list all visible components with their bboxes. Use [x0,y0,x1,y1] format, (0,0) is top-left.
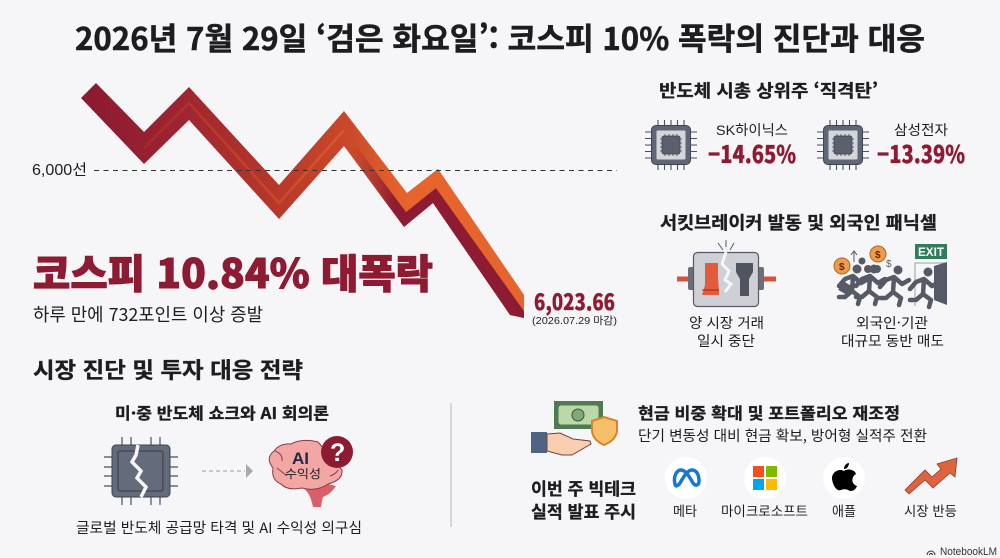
label: 시장 반등 [904,500,957,520]
icon: brain with question mark: 수익성 [285,465,321,482]
icon: Meta [665,457,707,499]
icon: investors fleeing to exit: EXIT [918,245,945,259]
label: 양 시장 거래 [689,313,764,333]
heading: 이번 주 빅테크 [531,475,636,500]
icon: investors fleeing to exit [834,244,947,307]
section heading: 시장 진단 및 투자 대응 전략 [33,353,303,385]
icon: investors fleeing to exit: $ [875,250,881,261]
panel: US-China chip shock and AI doubt [76,400,362,538]
label: 외국인·기관 [856,313,928,333]
heading: 실적 발표 주시 [531,498,636,523]
icon: chip Samsung [817,120,869,170]
SK hynix label: SK하이닉스 [716,122,788,138]
icon: brain with question mark: AI [292,449,309,468]
closing value: (2026.07.29 마감) [532,315,617,327]
closing value [532,285,617,327]
panel: big tech earnings [531,457,957,523]
label: 대규모 동반 매도 [841,331,944,351]
caption: 글로벌 반도체 공급망 타격 및 AI 수익성 의구심 [76,517,362,538]
panel: semiconductor hit [645,78,965,170]
icon: circuit breaker [677,240,776,306]
arrow [202,464,253,478]
heading: 현금 비중 확대 및 포트폴리오 재조정 [638,400,900,424]
title: 2026년 7월 29일 ‘검은 화요일’: 코스피 10% 폭락의 진단과 대응 [75,14,925,59]
heading: 서킷브레이커 발동 및 외국인 패닉셀 [660,210,937,235]
headline: plunge: 코스피 10.84% 대폭락 [33,242,433,300]
label: 일시 중단 [697,331,755,351]
SK hynix value: −14.65% [708,135,796,170]
closing value: 6,023.66 [534,285,615,317]
label: 메타 [673,500,698,520]
label: 마이크로소프트 [721,500,808,520]
6,000 reference line: 6,000선 [32,161,87,179]
icon: investors fleeing to exit: $ [839,262,845,273]
icon: rising arrow [905,458,957,494]
Samsung value: −13.39% [877,135,965,170]
icon: brain with question mark: ? [330,439,345,467]
icon: investors fleeing to exit: $ [886,259,892,270]
panel: circuit breaker and panic sell [660,210,947,351]
heading: 미·중 반도체 쇼크와 AI 회의론 [115,400,329,424]
description: 단기 변동성 대비 현금 확보, 방어형 실적주 전환 [638,425,927,446]
icon: brain with question mark [269,436,353,507]
icon: Microsoft [744,457,786,499]
Samsung label: 삼성전자 [894,122,948,138]
icon: chip SK [645,120,697,170]
heading: 반도체 시총 상위주 ‘직격탄’ [659,78,878,103]
label: 애플 [832,500,856,520]
icon: cash in hand with shield [531,401,617,455]
icon: Apple [823,457,865,499]
icon: broken chip [104,437,178,505]
chart: KOSPI plunge line [81,83,524,318]
panel: cash and portfolio [531,400,927,455]
sub headline: 하루 만에 732포인트 이상 증발 [33,301,263,327]
